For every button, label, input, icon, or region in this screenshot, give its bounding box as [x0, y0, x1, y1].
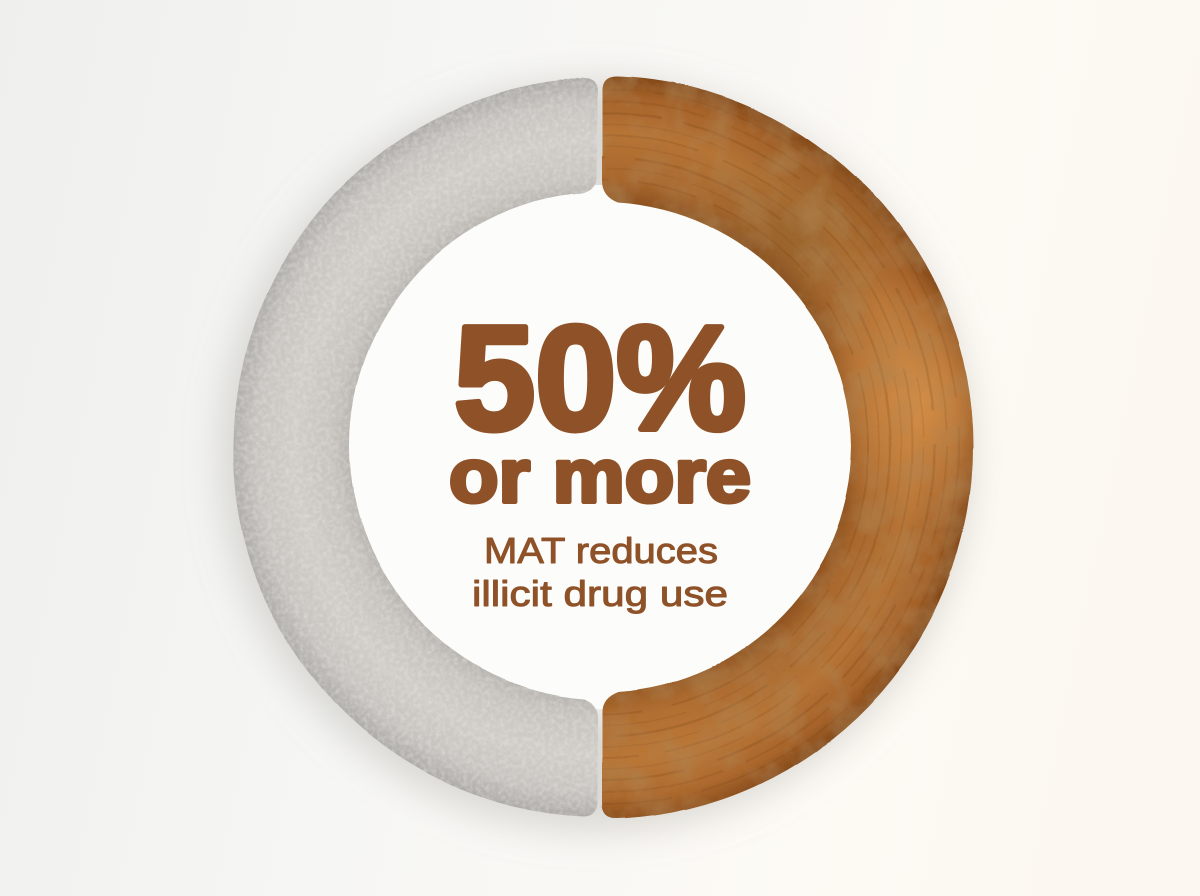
donut chart: [220, 60, 990, 830]
big number: 50%: 50%: [454, 296, 746, 461]
caption line 1: MAT reduces: [484, 530, 718, 571]
caption line 2: illicit drug use: [472, 573, 728, 614]
wood grain: [602, 94, 960, 805]
centre label: [449, 296, 751, 614]
ring drop shadow: [280, 140, 912, 772]
subheading: or more: or more: [449, 434, 751, 519]
segment: remaining half, grey felt: [233, 78, 598, 816]
infographic: donut chart on a light wall: [204, 72, 982, 840]
segment: 50 percent, orange-brown wood: [602, 76, 974, 818]
inner wall of the ring: [339, 185, 863, 709]
